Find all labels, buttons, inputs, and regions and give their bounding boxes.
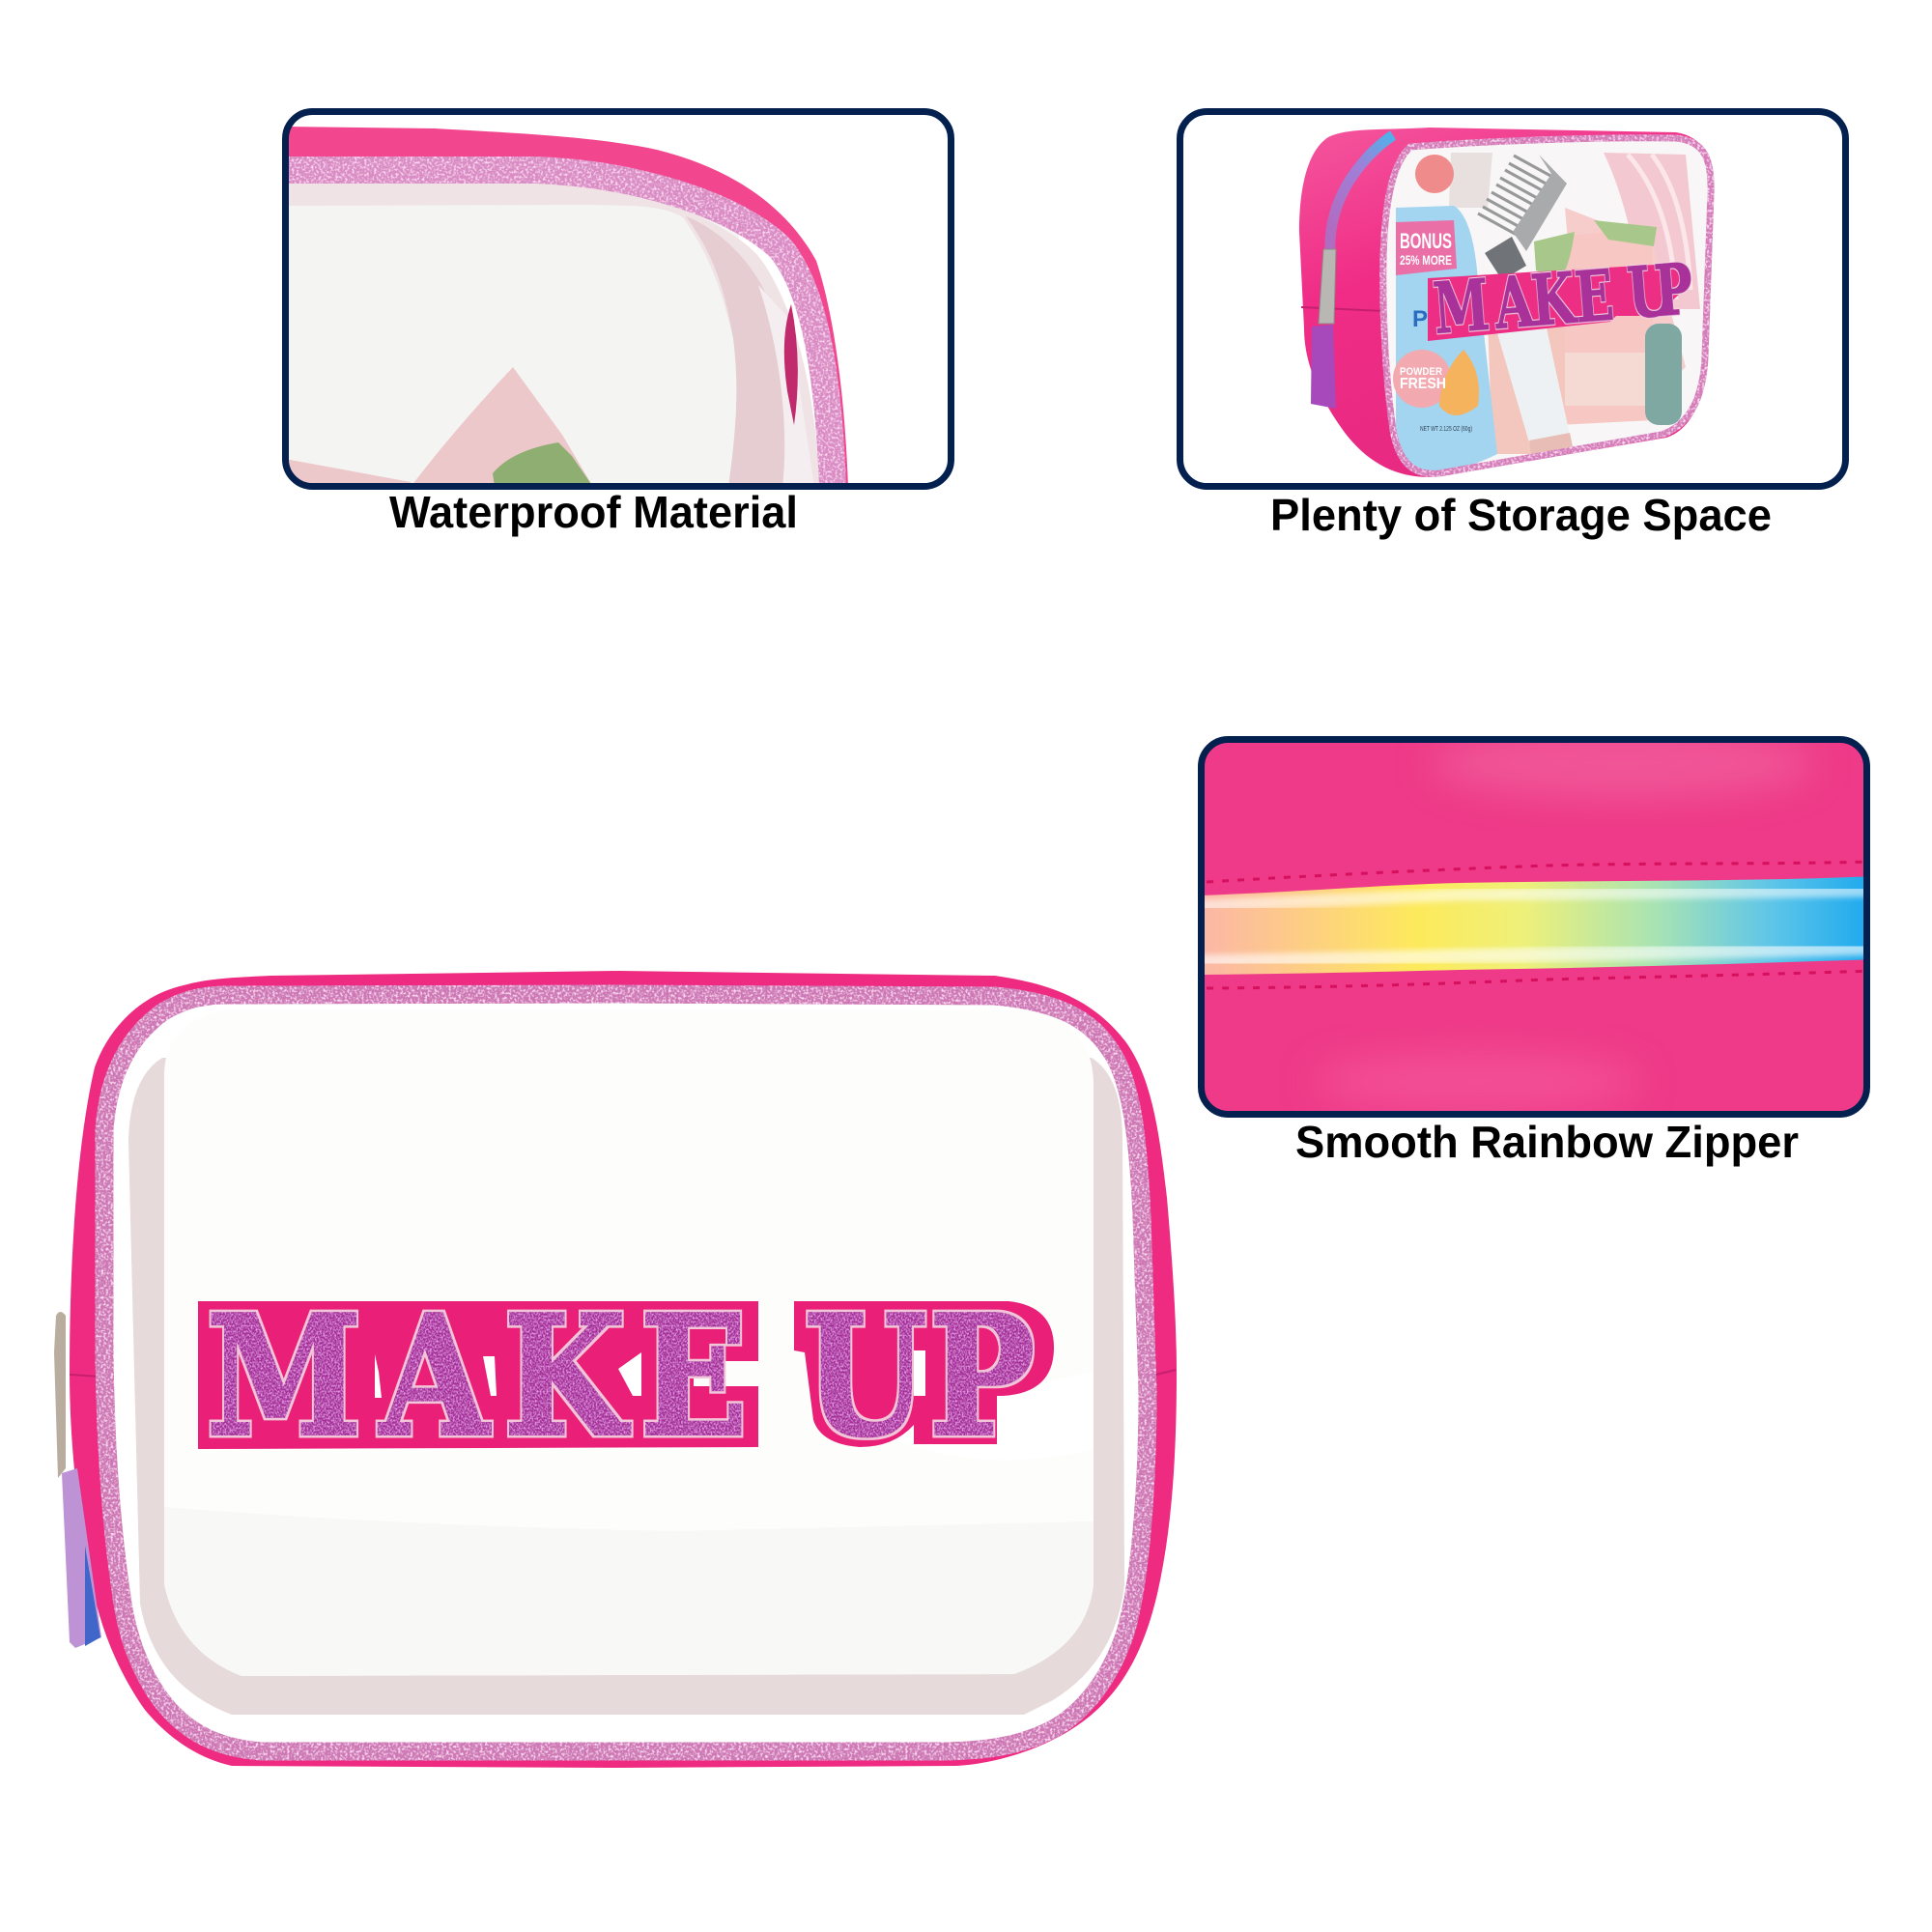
comb <box>1478 155 1567 251</box>
lettering backing: UP <box>794 1301 1054 1447</box>
window interior <box>285 193 739 487</box>
stitching bottom <box>1207 971 1872 988</box>
frame <box>1202 740 1866 1115</box>
zipper rainbow <box>1201 876 1876 975</box>
small bag glitter trim <box>1383 138 1711 473</box>
seam right <box>1156 1370 1176 1375</box>
window contents <box>1386 141 1708 470</box>
gray grip <box>1485 237 1526 274</box>
pink leather outer <box>70 971 1177 1768</box>
brand: Po <box>1412 306 1442 332</box>
make up lettering <box>198 1281 1054 1473</box>
white tube <box>1497 324 1570 449</box>
seam <box>1301 307 1383 311</box>
orange back item <box>1488 319 1565 454</box>
powder fresh: FRESH <box>1400 376 1446 392</box>
glitter trim <box>285 170 833 487</box>
panel: plenty of storage space <box>1180 112 1845 487</box>
inner white lining <box>285 184 819 487</box>
lettering slit <box>914 1350 925 1396</box>
small lettering backing <box>1428 264 1683 341</box>
zipper <box>1330 135 1393 253</box>
bonus badge <box>1396 220 1457 275</box>
small bag body <box>1299 128 1713 477</box>
small make up lettering <box>1428 247 1695 350</box>
green leaves <box>1534 232 1575 272</box>
fabric band <box>686 216 784 483</box>
panel: smooth rainbow zipper <box>1201 729 1876 1115</box>
stitching top <box>1207 862 1872 882</box>
green leaf <box>493 442 591 483</box>
mint bottle <box>1645 324 1682 425</box>
label: smooth rainbow zipper: Smooth Rainbow Zipper <box>1295 1117 1799 1167</box>
zipper tag <box>62 1468 101 1648</box>
reflection right <box>869 1372 1094 1460</box>
seam left <box>70 1375 100 1377</box>
zipper tag <box>1311 325 1336 409</box>
powder fresh: NET WT 2.125 OZ (60g) <box>1420 426 1472 433</box>
blue bottle <box>1396 206 1497 473</box>
panel: waterproof material <box>285 111 951 487</box>
bonus badge: 25% MORE <box>1400 252 1452 268</box>
pink item in window <box>411 367 593 487</box>
clear window <box>104 994 1148 1751</box>
label: plenty of storage space: Plenty of Storage Space <box>1270 490 1772 540</box>
leather highlights <box>1430 729 1816 797</box>
coral flower <box>1415 155 1454 193</box>
band highlights <box>1628 155 1690 299</box>
frame background <box>1180 112 1845 487</box>
bonus badge: BONUS <box>1400 229 1452 253</box>
powder fresh <box>1393 350 1479 433</box>
pink bands <box>1604 153 1700 309</box>
window pane <box>164 1010 1094 1676</box>
tag blue edge <box>85 1546 100 1646</box>
zipper pull <box>54 1312 66 1478</box>
lettering backing: MAKE <box>198 1301 758 1449</box>
fabric lining <box>128 1058 1124 1715</box>
white bottle <box>1449 153 1492 208</box>
lettering text: MAKE UP <box>207 1281 1035 1473</box>
pink bag item <box>1565 208 1686 371</box>
main product: clear make up bag <box>54 971 1177 1768</box>
lettering gaps <box>375 1352 641 1398</box>
packet <box>1565 258 1648 425</box>
reflection lower <box>164 1507 1094 1676</box>
zipper pull <box>1319 249 1336 324</box>
powder fresh: POWDER <box>1400 366 1442 378</box>
label: waterproof material: Waterproof Material <box>389 487 798 537</box>
pink leather edge <box>285 127 848 487</box>
glitter trim <box>104 994 1148 1751</box>
frame <box>286 112 951 487</box>
small lettering text: MAKE UP <box>1431 247 1695 350</box>
